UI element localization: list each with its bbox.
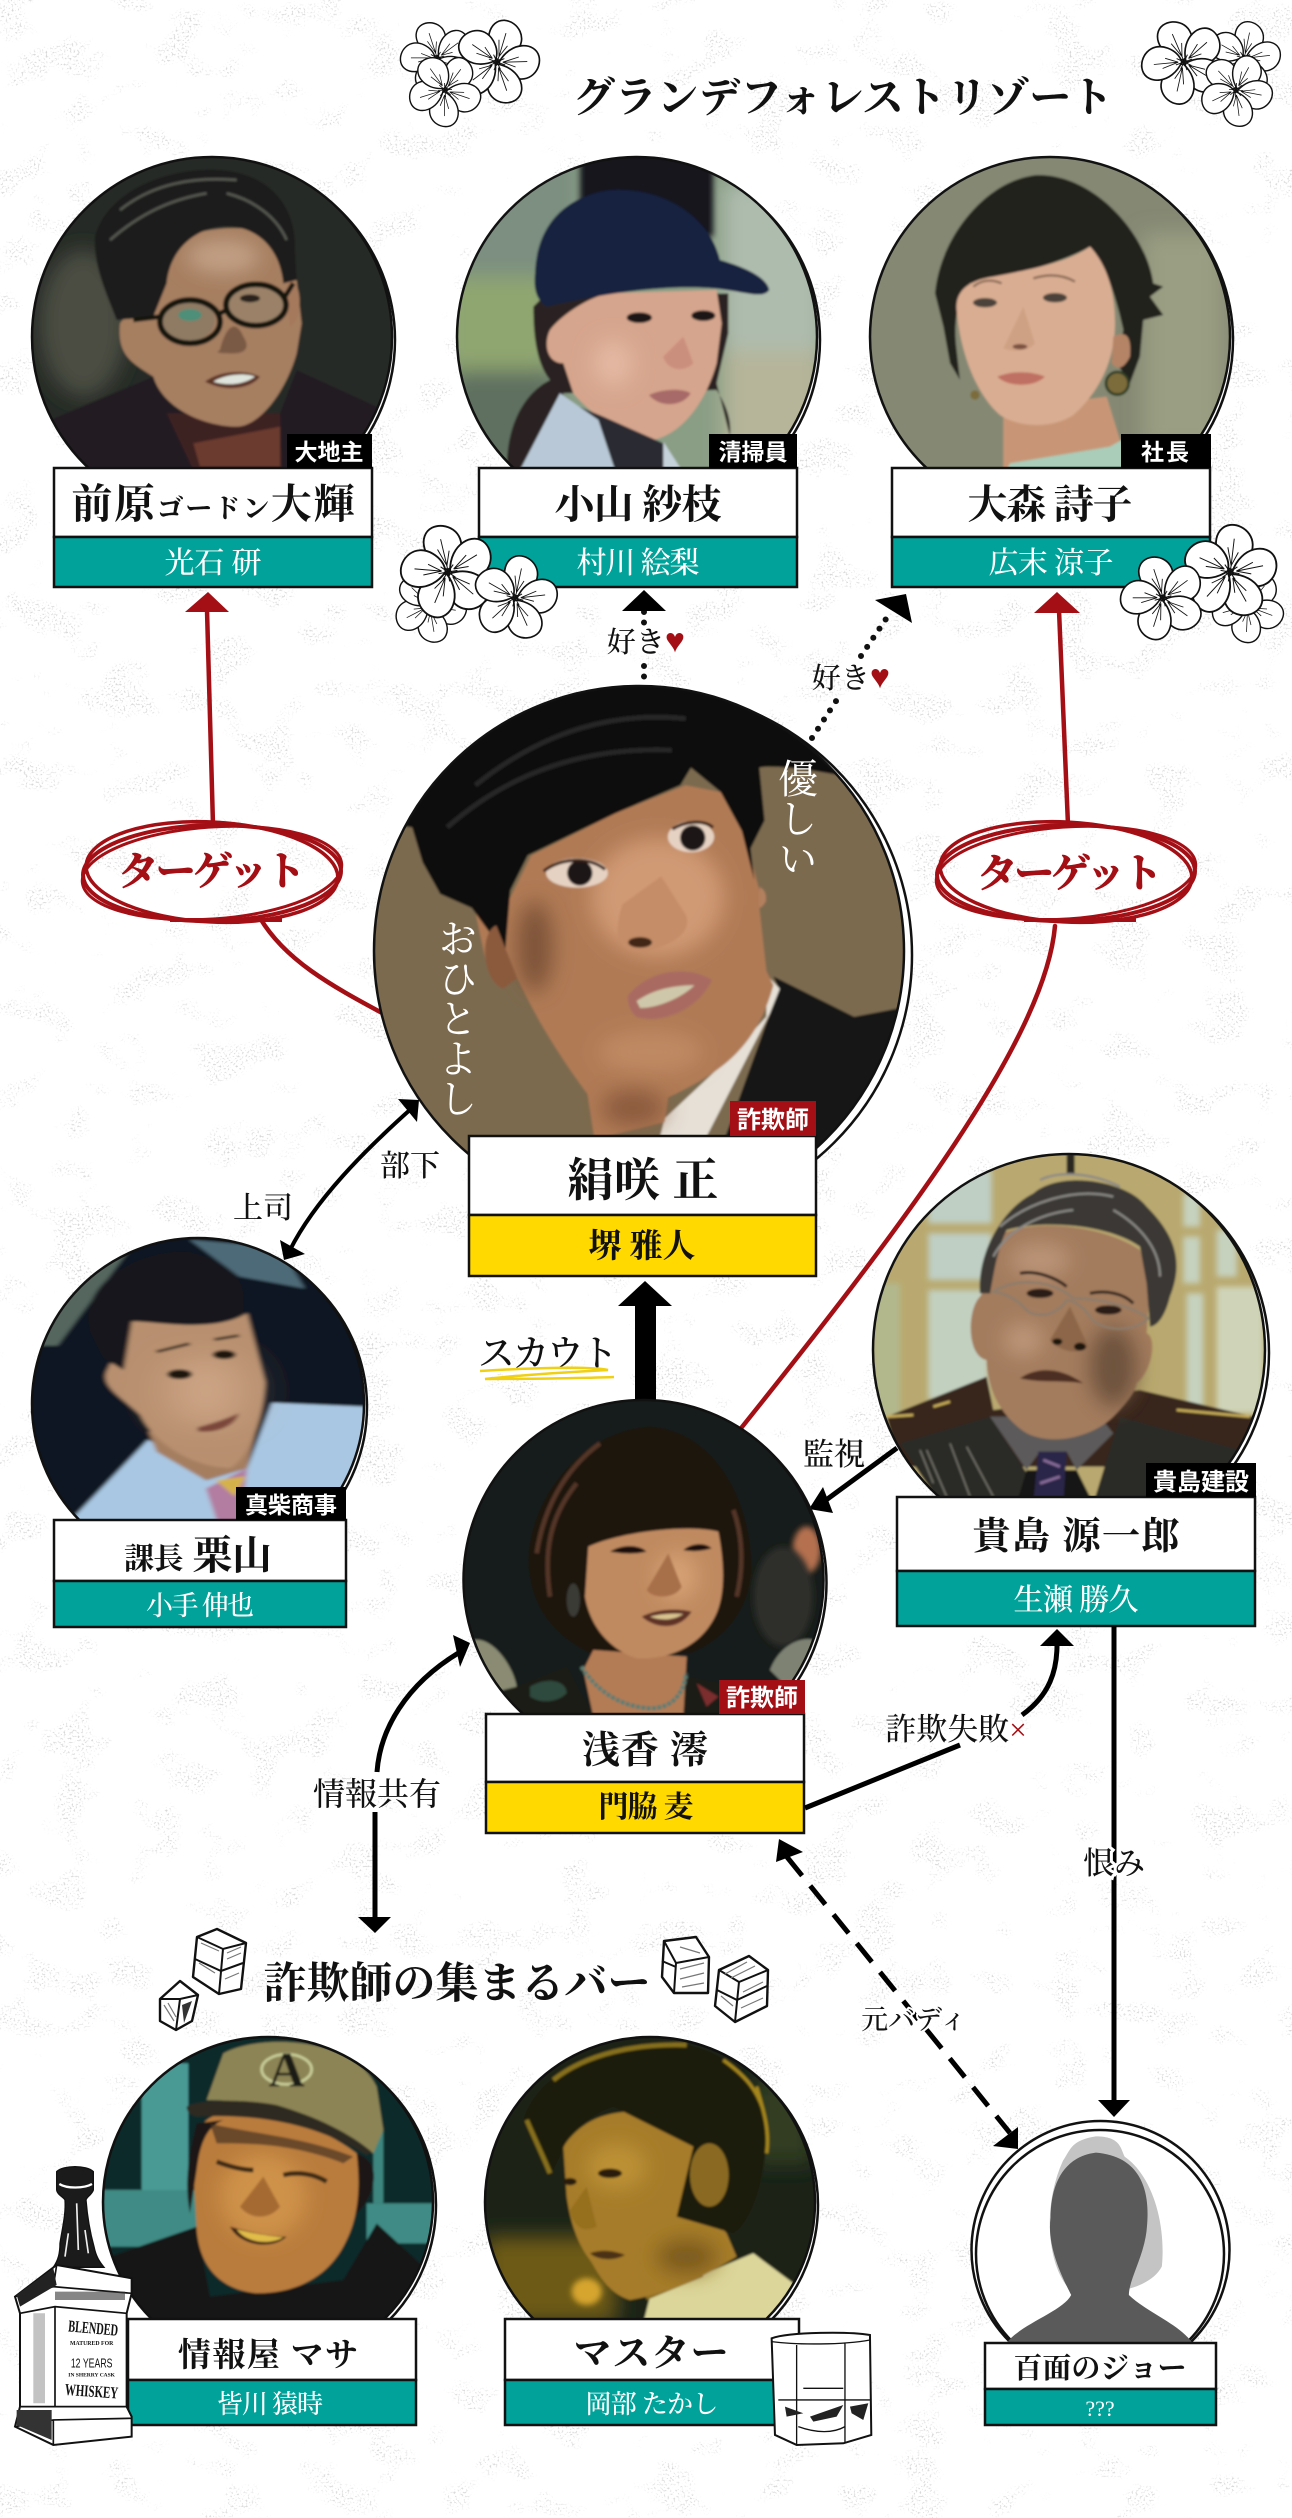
name box: 貴島 源一郎 [972,1516,1180,1558]
section title: bar: 詐欺師の集まるバー [264,1960,650,2008]
name box: 広末 涼子 [988,547,1114,580]
ice cube right 1 [662,1937,709,1993]
character: Kinusaki (centre) [356,666,935,1276]
name box: 生瀬 勝久 [1014,1584,1138,1617]
trait: good-natured: おひとよし [432,918,478,1118]
target badge: right [933,815,1199,929]
role tag: 貴島建設 [1153,1469,1249,1496]
arrow: scam failed [805,1629,1074,1808]
name box: 光石 研 [164,547,262,580]
character: Joe [972,2121,1230,2425]
label: former buddy: 元バディ [861,2005,967,2035]
flowers: lower left [377,517,570,659]
name box [897,1497,1255,1626]
name box [469,1136,816,1276]
target badge: right: ターゲット [978,851,1162,896]
flowers: lower right [1108,517,1292,659]
name box: 百面のジョー [1014,2352,1186,2385]
character: Koyama [456,156,822,588]
name box: ??? [1085,2396,1115,2421]
portrait: Omori [871,158,1229,467]
character: Asaka [462,1398,828,1834]
whiskey bottle: IN SHERRY CASK [68,2373,116,2379]
portrait: Masa: A [269,2042,305,2098]
title: resort: グランデフォレストリゾート [573,76,1113,122]
name box [128,2319,416,2425]
whiskey bottle: 12 YEARS [71,2356,112,2370]
trait: kind: 優しい [772,758,818,878]
name box: 村川 絵梨 [576,547,700,580]
portrait: Master [486,2038,814,2318]
role tag: 清掃員 [718,439,788,465]
portrait: Kinusaki [375,687,903,1152]
role tag: 大地主 [294,439,364,465]
name box: 小山 紗枝 [554,482,722,527]
dotted arrow: likes Omori [812,594,912,738]
name box: 課長 栗山 [124,1533,272,1578]
target badge: left [79,815,345,929]
name box [985,2343,1216,2425]
double arrow: boss and subordinate [280,1099,419,1260]
portrait: silhouette [972,2121,1230,2379]
label: subordinate: 部下 [380,1150,440,1183]
name box [54,1520,346,1627]
role tag [719,1680,805,1714]
character: Kijima [872,1152,1270,1628]
double arrow: info sharing [358,1635,470,1933]
name box: 大森 詩子 [968,482,1132,527]
whiskey glass [772,2333,871,2445]
ice cube left 1 [160,1981,198,2030]
label: boss: 上司 [233,1192,293,1225]
label: surveillance: 監視 [803,1437,865,1472]
flowers: top left [390,7,554,144]
role tag: 真柴商事 [245,1492,337,1518]
ice cube left 2 [193,1929,246,1994]
role tag [709,434,797,468]
whiskey bottle: BLENDED [67,2316,119,2340]
portrait: Maehara [33,158,391,467]
role tag [236,1487,346,1520]
name box: 絹咲 正 [568,1155,718,1206]
name box [892,468,1210,587]
role tag: 詐欺師 [726,1685,798,1712]
whiskey bottle [15,2167,132,2445]
whiskey bottle: MATURED FOR [70,2340,113,2347]
role tag: 詐欺師 [737,1107,809,1134]
arrow: surveillance [809,1448,897,1513]
portrait: Kijima [874,1155,1264,1496]
label: scam failed: 詐欺失敗× [885,1712,1027,1747]
name box: 門脇 麦 [598,1791,694,1824]
name box: 小手 伸也 [146,1591,254,1621]
target badge: left: ターゲット [118,849,306,894]
red lines and arrows to targets [185,592,1080,1442]
flowers: top right [1127,7,1291,145]
character: Maehara [30,156,396,588]
label: likes: 好き♥ [812,659,890,696]
label: grudge: 恨み [1083,1846,1145,1881]
character: Omori [868,156,1234,588]
portrait: Asaka [464,1401,822,1713]
character: Master [484,2036,820,2426]
ice cube right 2 [715,1956,768,2022]
arrow: grudge [1098,1626,1130,2117]
name box [486,1714,804,1833]
role tag [1146,1463,1256,1497]
scout arrow [618,1281,672,1408]
character: Kurishima [30,1236,368,1628]
label: likes: 好き♥ [607,623,685,660]
name box: マスター [574,2333,728,2375]
dotted arrow: likes Koyama [622,590,666,686]
label: scout with underline: スカウト [478,1334,618,1375]
name box: 浅香 澪 [582,1730,708,1772]
dashed double arrow: former buddy [776,1839,1018,2149]
label: info sharing: 情報共有 [313,1776,441,1812]
whiskey bottle: WHISKEY [64,2380,119,2403]
portrait: Koyama [458,158,816,467]
role tag [1121,434,1211,468]
role tag [287,434,372,468]
name box: 前原ゴードン大輝 [72,481,354,527]
role tag [730,1101,816,1136]
name box: 情報屋 マサ [178,2337,358,2374]
name box [479,468,797,587]
character: Masa [102,2036,438,2426]
name box: 皆川 猿時 [217,2390,323,2419]
portrait: Masa [104,2038,432,2318]
portrait: Kurishima [33,1239,363,1519]
role tag: 社長 [1141,439,1191,465]
name box: 堺 雅人 [588,1228,696,1265]
name box: 岡部 たかし [586,2390,718,2419]
name box [54,468,372,587]
name box [505,2319,799,2425]
